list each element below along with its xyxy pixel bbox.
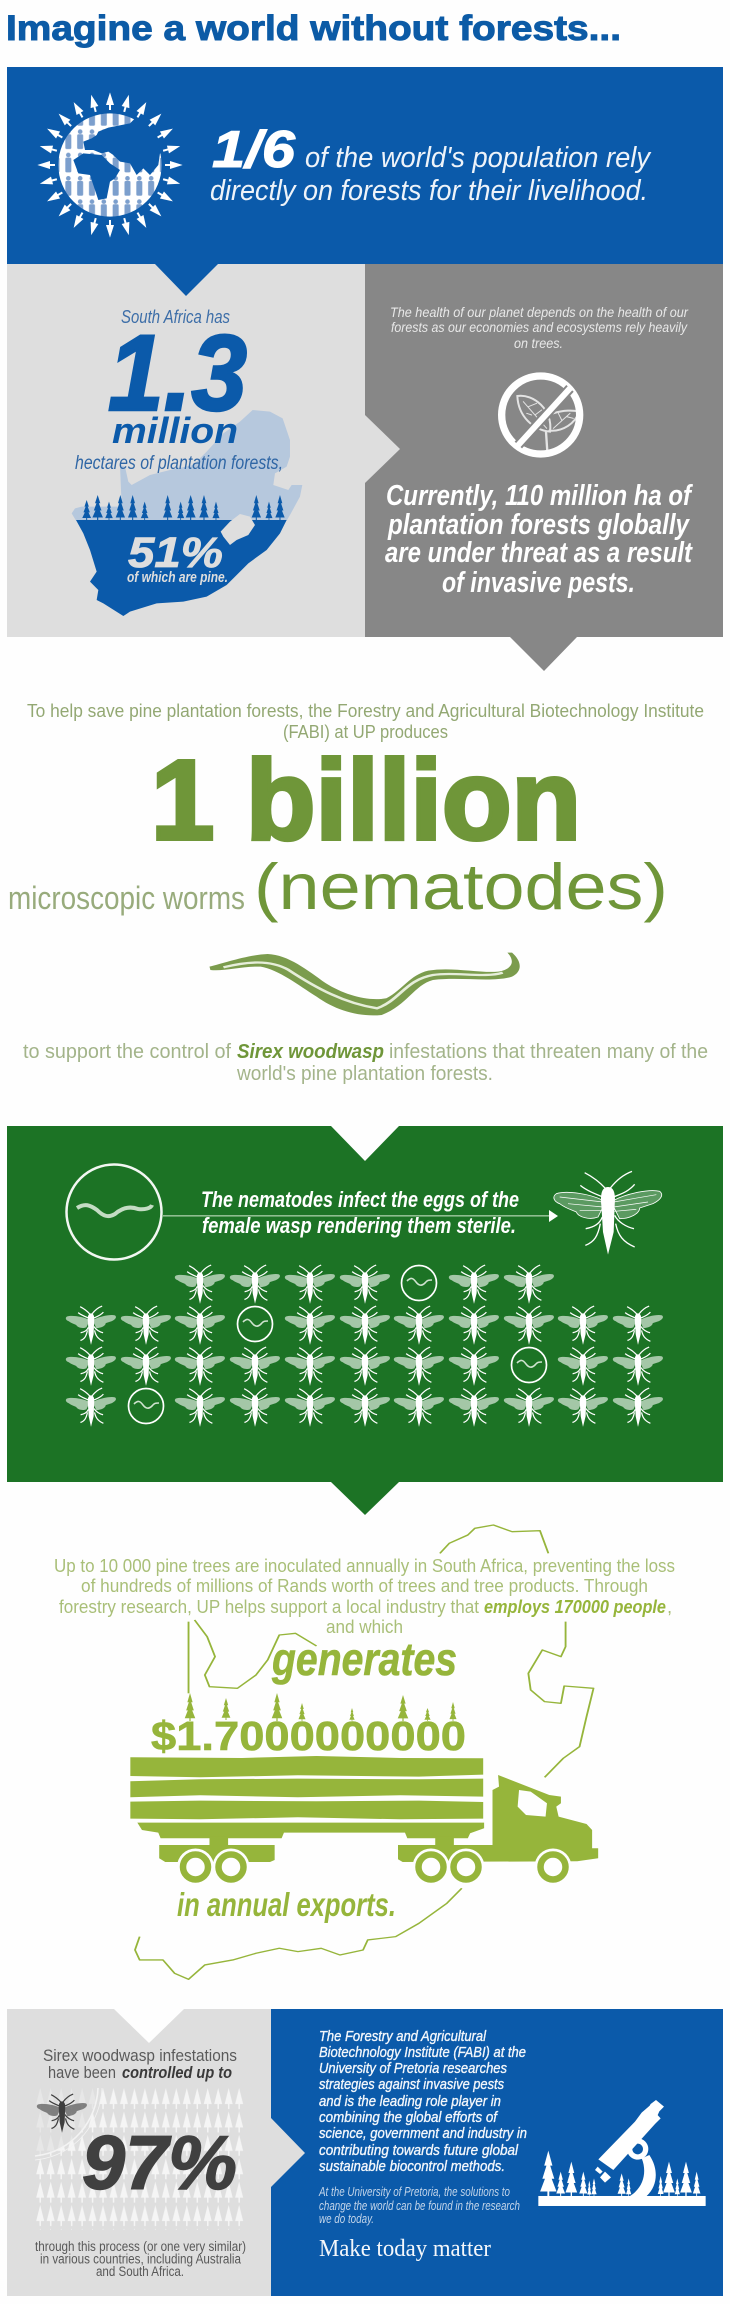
text: tagline: Make today matter — [319, 2236, 491, 2262]
map: South Africa — [72, 410, 302, 616]
text: FABI description: combining the global efforts of — [319, 2109, 499, 2126]
panel: invasive pests threat — [365, 264, 723, 671]
text: process line 2: in various countries, including Australia — [40, 2252, 241, 2266]
text: employs 170000 people: employs 170000 people — [484, 1596, 666, 1617]
stat: 1/6: 1/6 — [212, 121, 296, 179]
panel: South Africa plantations — [7, 263, 365, 637]
text: generates: generates — [271, 1633, 457, 1685]
graphic: arc around wasp — [35, 2088, 102, 2160]
text: comma: , — [667, 1596, 672, 1617]
panel: global population — [7, 67, 723, 264]
text: FABI description: strategies against invasive pests — [319, 2076, 504, 2093]
arrow: green down — [331, 1482, 399, 1515]
arrow: infection line — [162, 1210, 558, 1222]
notch: top arrow — [331, 1126, 399, 1161]
text: have been: have been — [48, 2063, 116, 2082]
trees above figure — [185, 1693, 457, 1721]
text: nematodes: (nematodes) — [254, 850, 668, 923]
text: intro line 2: (FABI) at UP produces — [283, 721, 448, 742]
text: South Africa has: South Africa has — [121, 307, 230, 327]
text: FABI description: and is the leading role player in — [319, 2093, 501, 2110]
text: population line 1: of the world's population rely — [305, 142, 651, 174]
notch: white arrow — [114, 2009, 184, 2043]
text: solutions note: change the world can be found in the research — [319, 2199, 520, 2213]
panel: 97 percent controlled — [7, 2009, 271, 2296]
text: hectares: hectares of plantation forests, — [75, 452, 283, 474]
text: annual exports: in annual exports. — [177, 1886, 396, 1923]
arrow: blue down — [154, 263, 219, 296]
text: population line 2: directly on forests for their livelihood. — [210, 175, 648, 207]
stat: million: million — [112, 410, 238, 451]
panel: FABI research — [271, 2009, 723, 2296]
text: FABI description: The Forestry and Agricultural — [319, 2028, 487, 2045]
graphic: tree grid — [35, 2088, 244, 2230]
stat: export value: $1.7000000000 — [151, 1713, 466, 1759]
text: FABI description: science, government and industry in — [319, 2125, 527, 2142]
text: process line 3: and South Africa. — [96, 2264, 184, 2279]
text: inoculation line 1: Up to 10 000 pine trees are inoculated annually in South Africa, preventing the loss — [54, 1555, 675, 1576]
stat: 1 billion: 1 billion — [151, 737, 581, 863]
text: infection line 2: female wasp rendering them sterile. — [202, 1213, 516, 1238]
illustration: nematode worm — [209, 953, 520, 1015]
icon: dark wasp — [37, 2094, 87, 2133]
grid: wasps and infected eggs — [66, 1265, 663, 1427]
text: planet health line 1: The health of our planet depends on the health of our — [390, 304, 689, 320]
icon: logging truck — [130, 1756, 598, 1886]
text: process line 1: through this process (or one very similar) — [35, 2239, 246, 2254]
text: planet health line 2: forests as our economies and ecosystems rely heavily — [391, 319, 688, 335]
text: controlled up to: controlled up to — [122, 2063, 232, 2082]
text: of which are pine: of which are pine. — [127, 570, 228, 586]
map outline: South Africa — [135, 1525, 594, 1979]
arrow: gray right — [271, 2118, 305, 2187]
text: Sirex woodwasp: Sirex woodwasp — [237, 1041, 384, 1063]
text: solutions note: At the University of Pretoria, the solutions to — [318, 2185, 510, 2199]
stat: 1.3: 1.3 — [108, 312, 247, 433]
text: FABI description: contributing towards future global — [319, 2142, 519, 2159]
text: and which: and which — [326, 1616, 403, 1637]
section: exports — [54, 1525, 675, 1979]
arrow: light gray right — [365, 415, 400, 483]
text: microscopic worms: microscopic worms — [8, 880, 245, 916]
text: inoculation line 2: of hundreds of millions of Rands worth of trees and tree products. Through — [81, 1575, 648, 1596]
text: solutions note — [318, 2185, 520, 2226]
icon: female wasp — [554, 1171, 662, 1255]
text: support line 2: world's pine plantation forests. — [236, 1063, 493, 1085]
text: FABI description — [319, 2028, 527, 2175]
stat: 97%: 97% — [82, 2121, 237, 2206]
text: FABI description: sustainable biocontrol methods. — [319, 2158, 505, 2175]
text: inoculation line 3: forestry research, UP helps support a local industry that — [59, 1596, 479, 1617]
arrow: gray down — [510, 637, 577, 671]
title: Imagine a world without forests... — [6, 9, 621, 48]
text: infestation line 1: Sirex woodwasp infestations — [43, 2046, 237, 2065]
text: FABI description: Biotechnology Institute (FABI) at the — [319, 2044, 526, 2061]
text: currently line 4: of invasive pests. — [442, 567, 635, 599]
text: support line suffix: infestations that threaten many of the — [389, 1041, 708, 1063]
text: infection line 1: The nematodes infect the eggs of the — [201, 1187, 519, 1212]
icon: no leaves — [502, 376, 580, 454]
stat: 51%: 51% — [128, 529, 223, 577]
text: intro line 1: To help save pine plantation forests, the Forestry and Agricultural Biotechnology Institute — [27, 700, 704, 721]
text: FABI description: University of Pretoria researches — [319, 2060, 507, 2077]
icon: nematode in circle — [66, 1164, 162, 1260]
icon: globe of people — [37, 92, 183, 238]
panel: wasp infection — [7, 1126, 723, 1515]
section: nematodes — [8, 700, 708, 1085]
icon: microscope and trees — [538, 2100, 706, 2206]
text: solutions note: we do today. — [319, 2212, 374, 2226]
text: support line prefix: to support the control of — [23, 1041, 231, 1063]
text: planet health line 3: on trees. — [514, 335, 563, 351]
